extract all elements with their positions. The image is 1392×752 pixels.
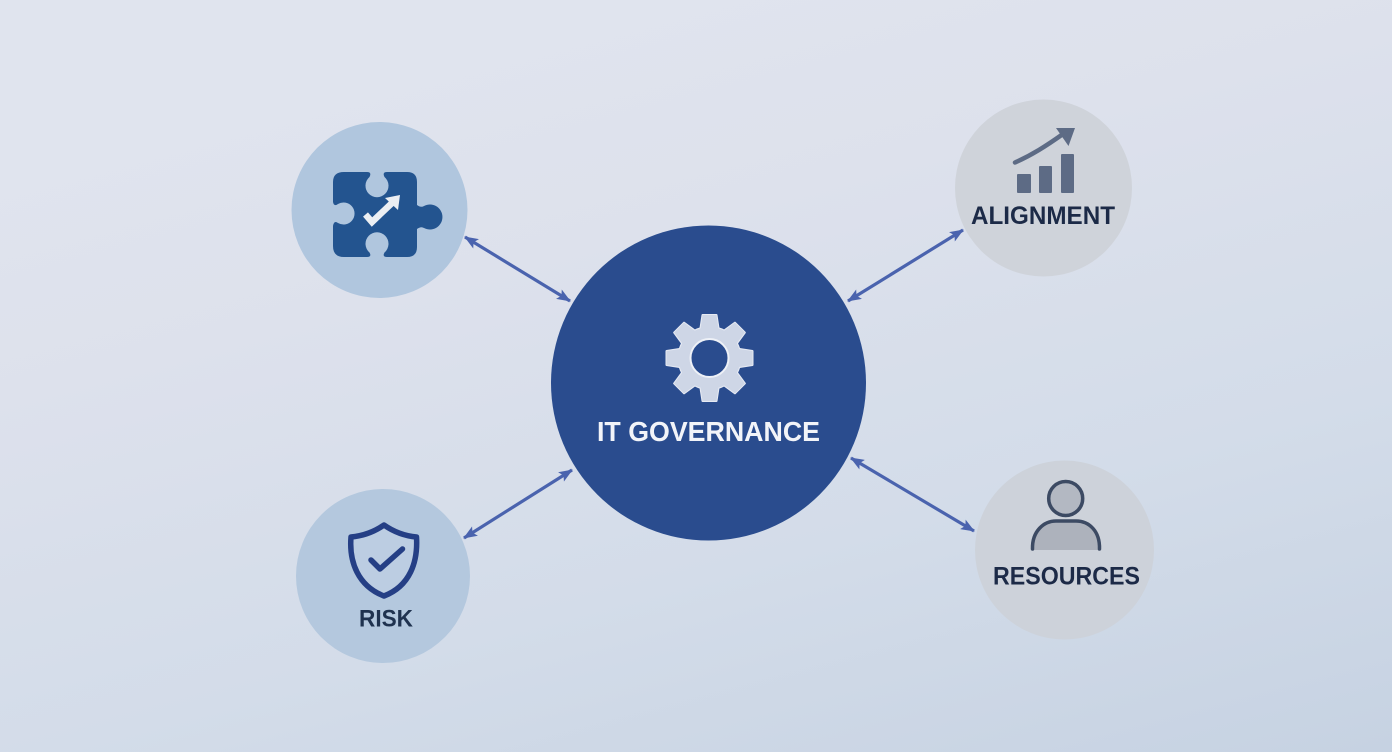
node label: RESOURCES xyxy=(993,562,1140,590)
panel: risk node xyxy=(296,489,470,663)
icon: gear xyxy=(666,315,752,401)
node circle xyxy=(975,460,1154,640)
arrow: risk node to hub xyxy=(464,470,572,538)
panel: alignment node xyxy=(955,100,1132,276)
icon: shield with check xyxy=(351,525,417,596)
arrow: puzzle node to hub xyxy=(465,237,570,301)
panel: strategy puzzle node xyxy=(292,122,468,298)
node circle xyxy=(292,122,468,298)
panel: resources node xyxy=(975,460,1154,640)
arrow: alignment node to hub xyxy=(848,230,963,301)
arrow: resources node to hub xyxy=(851,458,974,531)
icon: person xyxy=(1032,482,1100,550)
panel: central hub xyxy=(551,226,866,540)
node label: ALIGNMENT xyxy=(971,202,1115,230)
icon: check arrow xyxy=(366,195,400,222)
hub circle xyxy=(551,226,866,540)
node circle xyxy=(955,100,1132,276)
node circle xyxy=(296,489,470,663)
hub label: IT GOVERNANCE xyxy=(597,416,820,447)
icon: puzzle piece xyxy=(333,172,442,257)
node label: RISK xyxy=(359,606,414,632)
icon: rising bar chart xyxy=(1015,128,1075,193)
